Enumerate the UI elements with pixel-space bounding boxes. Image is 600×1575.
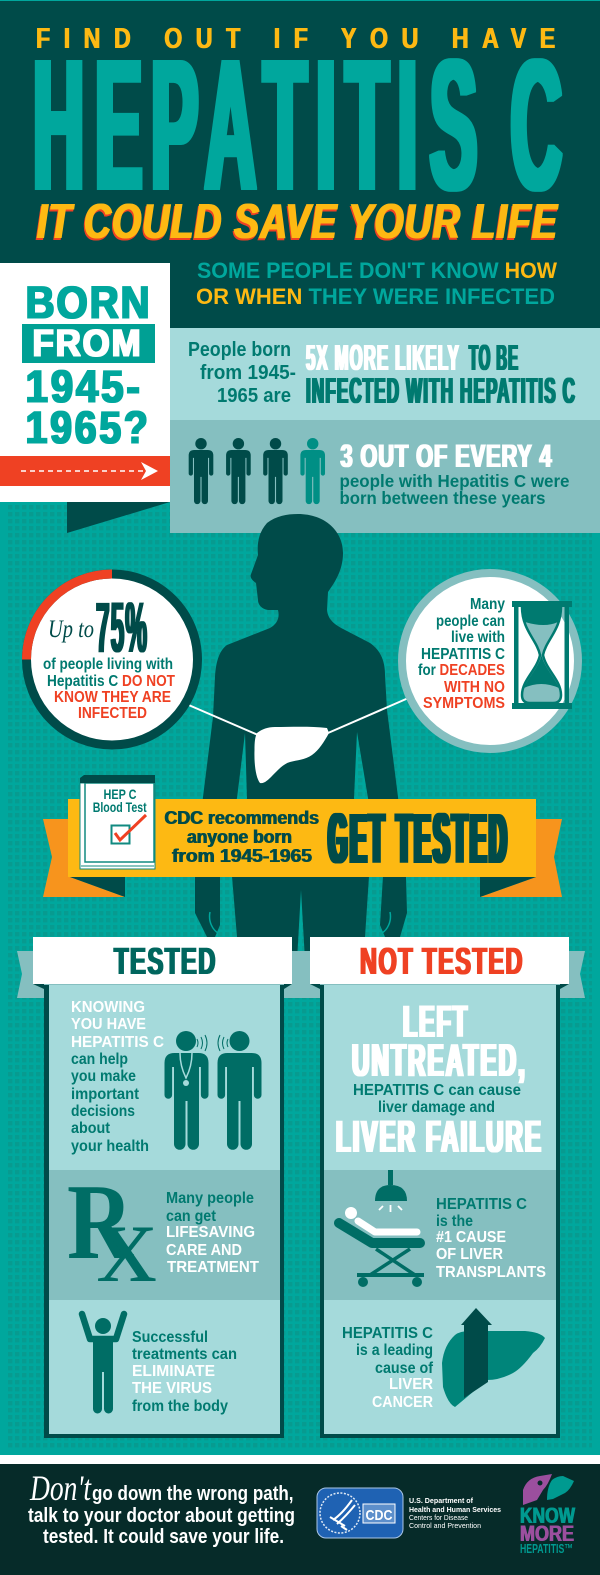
text: knowing you have hepatitis c: HEPATITIS C (71, 1034, 164, 1051)
callout: up to 75%: of people living with (43, 656, 173, 673)
callout: decades with no symptoms: live with (451, 629, 505, 646)
icon: liver (254, 727, 329, 783)
text: lifesaving care (166, 1190, 260, 1276)
text: leading cause of liver cancer: HEPATITIS C (342, 1325, 433, 1342)
text: left untreated liver failure (336, 996, 543, 1162)
text: people born from 1945-1965 are: People born (188, 339, 291, 361)
text: don't go down the wrong path: tested. It could save your life. (43, 1525, 284, 1548)
fold under born panel (67, 502, 170, 533)
text: #1 cause of liver transplants: is the (436, 1213, 473, 1230)
icon: Rx: R (67, 1163, 134, 1282)
banner tail: left (43, 819, 125, 897)
text: knowing you have hepatitis c: your health (71, 1138, 149, 1155)
callout: decades with no symptoms (402, 573, 578, 749)
panel: born from 1945-1965: FROM (32, 323, 142, 365)
icon: Rx: x (97, 1178, 157, 1307)
text: leading cause of liver cancer: LIVER (389, 1376, 433, 1393)
icon: four people (189, 438, 325, 504)
text: #1 cause of liver transplants (436, 1196, 546, 1281)
text: HHS and CDC agency names: Centers for Disease (409, 1513, 468, 1522)
icon: hourglass (512, 601, 572, 709)
text: don't go down the wrong path (28, 1468, 295, 1548)
heading: not tested (310, 937, 569, 984)
panel: 3 out of 4 (170, 420, 600, 533)
callout: decades with no symptoms: HEPATITIS C (421, 646, 505, 663)
body silhouette (195, 514, 407, 960)
text: knowing you have hepatitis c (71, 999, 164, 1155)
header panel (0, 1, 600, 328)
logo: CDC: CDC (366, 1507, 393, 1524)
ribbon behind tested panels (17, 951, 585, 998)
callout: up to 75%: INFECTED (78, 705, 147, 722)
text: people born from 1945-1965 are: 1965 are (217, 385, 291, 407)
text: knowing you have hepatitis c: YOU HAVE (71, 1016, 146, 1033)
text: leading cause of liver cancer: cause of (375, 1360, 434, 1377)
footer white strip (0, 1455, 600, 1464)
text: leading cause of liver cancer: is a leading (356, 1342, 433, 1359)
callout: decades with no symptoms: for DECADES (418, 662, 505, 679)
panel: not tested (310, 937, 569, 1438)
panel: born from 1945-1965: 1945- (26, 361, 142, 412)
text: eliminate the virus: THE VIRUS (132, 1380, 212, 1397)
text: knowing you have hepatitis c: KNOWING (71, 999, 145, 1016)
icon: hospital bed and lamp (339, 1170, 424, 1287)
logo: know more hepatitis (520, 1474, 575, 1556)
text: people born from 1945-1965 are (188, 339, 296, 407)
text: 3 out of every 4: people with Hepatitis C were (340, 471, 570, 491)
icon: blood test clipboard: HEP C (104, 786, 136, 802)
panel: born from 1945-1965 (0, 263, 170, 502)
callout: decades with no symptoms: SYMPTOMS (423, 695, 505, 712)
text: don't go down the wrong path: Don't (29, 1468, 92, 1508)
banner: CDC recommends get tested (68, 799, 536, 879)
text: lifesaving care: can get (166, 1208, 216, 1225)
text: some people don't know how or when: SOME PEOPLE DON'T KNOW HOW (197, 258, 557, 283)
text: knowing you have hepatitis c: you make (71, 1068, 136, 1085)
text: people born from 1945-1965 are: from 1945- (200, 362, 296, 384)
text: lifesaving care: TREATMENT (167, 1259, 260, 1276)
text: HHS and CDC agency names: Control and Prevention (409, 1521, 481, 1530)
text: #1 cause of liver transplants: OF LIVER (436, 1246, 503, 1263)
text: 3 out of every 4 (340, 438, 570, 508)
text: 3 out of every 4: born between these years (340, 488, 546, 508)
text: #1 cause of liver transplants: TRANSPLANTS (436, 1264, 546, 1281)
text: lifesaving care: Many people (166, 1190, 254, 1207)
text: eliminate the virus: ELIMINATE (132, 1363, 215, 1380)
heading: tested: TESTED (114, 941, 217, 983)
text: eliminate the virus: Successful (132, 1329, 208, 1346)
text: eliminate the virus: treatments can (132, 1346, 237, 1363)
text: HHS and CDC agency names: U.S. Department of (409, 1496, 473, 1505)
text: leading cause of liver cancer: CANCER (372, 1394, 433, 1411)
text: lifesaving care: LIFESAVING (166, 1224, 255, 1241)
text: don't go down the wrong path: talk to your doctor about getting (28, 1504, 295, 1527)
text: knowing you have hepatitis c: important (71, 1086, 139, 1103)
callout: up to 75% (26, 574, 198, 745)
icon: person with raised arms (82, 1314, 124, 1414)
title: Hepatitis C: HEPATITIS C (33, 21, 562, 229)
text: #1 cause of liver transplants: #1 CAUSE (436, 1229, 506, 1246)
panel: born from 1945-1965: 1965? (26, 402, 150, 453)
text: knowing you have hepatitis c: can help (71, 1051, 128, 1068)
banner tail: right (480, 819, 562, 897)
callout: up to 75%: Hepatitis C DO NOT (47, 673, 175, 690)
text: left untreated liver failure: HEPATITIS C can cause (353, 1082, 521, 1099)
icon: blood test clipboard: Blood Test (93, 799, 147, 815)
text: knowing you have hepatitis c: about (71, 1120, 110, 1137)
text: some people don't know how or when (196, 258, 557, 309)
text: some people don't know how or when: OR WHEN THEY WERE INFECTED (196, 284, 555, 309)
callout: up to 75%: KNOW THEY ARE (54, 689, 171, 706)
text: HHS and CDC agency names (409, 1496, 501, 1530)
logo: know more hepatitis: MORE (520, 1521, 574, 1546)
heading: find out if you have: FIND OUT IF YOU HAVE (36, 21, 555, 55)
panel: born from 1945-1965: BORN (26, 277, 152, 328)
text: HHS and CDC agency names: Health and Human Services (409, 1505, 501, 1514)
text: knowing you have hepatitis c: decisions (71, 1103, 135, 1120)
icon: blood test clipboard (80, 775, 155, 869)
banner: CDC recommends get tested: anyone born (187, 826, 292, 847)
text: lifesaving care: CARE AND (166, 1242, 242, 1259)
text: 5x more likely to be infected: TO BE (469, 337, 519, 378)
panel: tested (33, 937, 292, 1438)
text: #1 cause of liver transplants: HEPATITIS C (436, 1196, 527, 1213)
callout: up to 75%: Up to (48, 616, 94, 643)
panel: 5x more likely (170, 328, 600, 420)
text: left untreated liver failure: liver damage and (378, 1099, 495, 1116)
callout: decades with no symptoms: people can (436, 613, 505, 630)
icon: liver with arrow (442, 1308, 545, 1407)
text: leading cause of liver cancer (342, 1325, 434, 1411)
text: eliminate the virus (132, 1329, 237, 1415)
footer panel (0, 1464, 600, 1575)
banner: CDC recommends get tested: CDC recommends (164, 807, 319, 828)
text: left untreated liver failure: LEFT (403, 996, 469, 1047)
connector lines to liver (184, 696, 413, 735)
callout: up to 75%: 75% (96, 589, 148, 668)
callout: decades with no symptoms: WITH NO (444, 679, 505, 696)
icon: doctor and patient (164, 1031, 262, 1150)
logo: know more hepatitis: HEPATITIS™ (520, 1541, 573, 1556)
callout: decades with no symptoms: Many (470, 596, 505, 613)
text: 5x more likely to be infected (306, 337, 576, 411)
heading: tested (33, 937, 292, 984)
text: eliminate the virus: from the body (132, 1398, 228, 1415)
logo: CDC (317, 1488, 403, 1538)
banner: CDC recommends get tested: from 1945-1965 (172, 845, 312, 866)
logo: know more hepatitis: KNOW (520, 1503, 575, 1528)
text: don't go down the wrong path: go down the wrong path, (92, 1482, 294, 1505)
